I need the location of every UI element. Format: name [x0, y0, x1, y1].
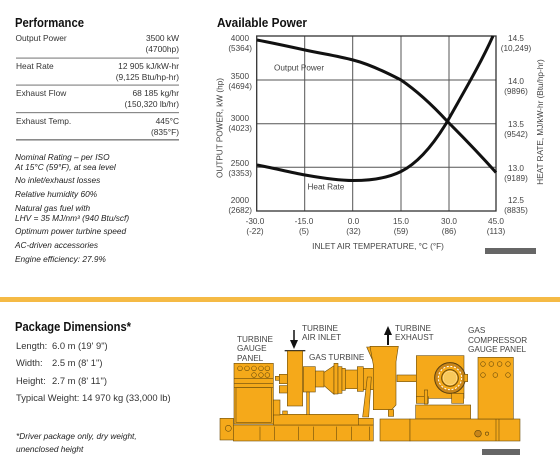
- label: turbine gauge panel: GAUGE: [237, 344, 267, 353]
- list: dimensions: 6.0 m (19' 9"): [52, 340, 108, 351]
- text block: rating notes: At 15°C (59°F), at sea level: [14, 162, 117, 172]
- air inlet: [275, 350, 305, 406]
- left axis ticks: (5364): [228, 44, 252, 53]
- arrow: exhaust: [387, 333, 389, 345]
- row: exhaust flow: 68 185 kg/hr: [132, 88, 179, 98]
- row: exhaust flow: (150,320 lb/hr): [125, 99, 179, 109]
- arrowhead: exhaust: [384, 326, 392, 335]
- row: heat rate: 12 905 kJ/kW-hr: [118, 61, 179, 71]
- row: output power: [16, 33, 179, 54]
- label: turbine air inlet: [302, 324, 341, 342]
- bottom axis ticks: 0.0: [348, 217, 360, 226]
- list: dimensions: 2.5 m (8' 1"): [52, 357, 102, 368]
- footnote: *Driver package only, dry weight,: [16, 431, 137, 441]
- list: dimensions: Length:: [16, 340, 47, 351]
- bottom axis ticks: (113): [487, 227, 506, 236]
- bottom axis ticks: 15.0: [393, 217, 409, 226]
- text block: rating notes: AC-driven accessories: [14, 240, 98, 250]
- left axis ticks: (3353): [228, 169, 252, 178]
- row: heat rate: [16, 61, 179, 82]
- right axis ticks: 14.5: [508, 34, 524, 43]
- text block: rating notes: LHV = 35 MJ/nm³ (940 Btu/scf): [15, 213, 129, 223]
- exhaust stack: [370, 346, 416, 416]
- text block: rating notes: Optimum power turbine speed: [15, 226, 127, 236]
- text block: rating notes: Engine efficiency: 27.9%: [15, 254, 106, 264]
- diagram: turbine package: [220, 324, 527, 441]
- row: exhaust temperature: Exhaust Temp.: [16, 116, 71, 126]
- bottom axis ticks: 45.0: [488, 217, 504, 226]
- bottom axis ticks: (-22): [246, 227, 264, 236]
- heading: performance: Performance: [15, 15, 84, 30]
- label: turbine air inlet: TURBINE: [302, 324, 338, 333]
- left axis ticks: (2682): [228, 206, 252, 215]
- panel: performance: [15, 15, 179, 141]
- axis title: left: OUTPUT POWER, kW (hp): [216, 78, 224, 178]
- right axis ticks: (9896): [504, 87, 528, 96]
- row: output power: 3500 kW: [146, 33, 179, 43]
- right axis ticks: 13.0: [508, 164, 524, 173]
- label: turbine air inlet: AIR INLET: [302, 333, 341, 342]
- right axis ticks: (9189): [504, 174, 528, 183]
- curve: heat rate: [257, 36, 493, 180]
- row: exhaust temperature: [16, 116, 179, 137]
- label: turbine exhaust: EXHAUST: [395, 333, 434, 342]
- text block: rating notes: Nominal Rating – per ISO: [15, 152, 110, 162]
- label: turbine gauge panel: TURBINE: [237, 335, 273, 344]
- curve: output power: [257, 40, 496, 172]
- label: gas compressor gauge panel: GAS: [468, 326, 486, 335]
- right axis ticks: (9542): [504, 130, 528, 139]
- arrow: air inlet: [293, 330, 295, 341]
- label: output power: Output Power: [274, 64, 324, 72]
- turbine gauge panel: [234, 363, 287, 424]
- label: gas turbine: GAS TURBINE: [309, 353, 365, 362]
- right axis ticks: 12.5: [508, 196, 524, 205]
- bottom axis ticks: (86): [442, 227, 457, 236]
- equipment: left half: [220, 347, 385, 441]
- compressor gauge panel: [478, 357, 513, 419]
- line chart: available power: [216, 34, 545, 251]
- skid base right: [380, 419, 520, 441]
- left axis ticks: (4023): [228, 124, 252, 133]
- row: output power: (4700hp): [145, 44, 179, 54]
- axis title: right: HEAT RATE, MJ/kW-hr (Btu/hp-hr): [536, 59, 545, 185]
- axis title: bottom: INLET AIR TEMPERATURE, °C (°F): [312, 242, 444, 251]
- label: turbine exhaust: [395, 324, 434, 342]
- right axis ticks: 14.0: [508, 77, 524, 86]
- text block: rating notes: No inlet/exhaust losses: [15, 175, 100, 185]
- list: dimensions: Width:: [16, 357, 43, 368]
- bottom axis ticks: 30.0: [441, 217, 457, 226]
- heading: package dimensions: Package Dimensions*: [15, 319, 132, 334]
- list: dimensions: [16, 340, 171, 403]
- row: heat rate: (9,125 Btu/hp-hr): [116, 72, 179, 82]
- left axis ticks: (4694): [228, 82, 252, 91]
- left axis ticks: 3000: [231, 114, 249, 123]
- left axis ticks: 2500: [231, 159, 249, 168]
- gas turbine: [303, 347, 385, 417]
- label: turbine gauge panel: [237, 335, 273, 363]
- bottom axis ticks: (5): [299, 227, 309, 236]
- bottom axis ticks: -30.0: [246, 217, 265, 226]
- label: turbine gauge panel: PANEL: [237, 354, 264, 363]
- row: heat rate: Heat Rate: [16, 61, 54, 71]
- label: gas compressor gauge panel: COMPRESSOR: [468, 336, 527, 345]
- label: gas compressor gauge panel: [468, 326, 527, 354]
- equipment: right half: [370, 346, 520, 441]
- footnote: [16, 431, 137, 454]
- row: exhaust flow: Exhaust Flow: [16, 88, 67, 98]
- row: exhaust flow: [16, 88, 179, 109]
- left axis ticks: 4000: [231, 34, 249, 43]
- row: exhaust temperature: (835°F): [151, 127, 179, 137]
- row: exhaust temperature: 445°C: [156, 116, 179, 126]
- text block: rating notes: Relative humidity 60%: [15, 189, 98, 199]
- bottom axis ticks: (32): [346, 227, 361, 236]
- list: dimensions: 2.7 m (8' 11"): [52, 375, 107, 386]
- divider band: [0, 297, 560, 302]
- text block: rating notes: Natural gas fuel with: [15, 203, 91, 213]
- bottom axis ticks: (59): [394, 227, 409, 236]
- label: gas compressor gauge panel: GAUGE PANEL: [468, 345, 527, 354]
- right axis ticks: (8835): [504, 206, 528, 215]
- label: heat rate: Heat Rate: [308, 182, 345, 192]
- list: dimensions: Typical Weight: 14 970 kg (33,000 lb): [16, 392, 171, 403]
- left axis ticks: 3500: [231, 72, 249, 81]
- right axis ticks: [501, 34, 532, 215]
- text block: rating notes: [14, 152, 129, 264]
- skid base left: [220, 414, 373, 441]
- right axis ticks: 13.5: [508, 120, 524, 129]
- right axis ticks: (10,249): [501, 44, 532, 53]
- arrowhead: air inlet: [290, 340, 298, 349]
- heading: available power: Available Power: [217, 15, 307, 30]
- footnote: unenclosed height: [16, 444, 84, 454]
- panel: package dimensions: [15, 319, 171, 454]
- bottom axis ticks: -15.0: [295, 217, 314, 226]
- left axis ticks: [228, 34, 252, 215]
- left axis ticks: 2000: [231, 196, 249, 205]
- compressor: [416, 356, 471, 419]
- label: turbine exhaust: TURBINE: [395, 324, 431, 333]
- bottom axis ticks: [246, 217, 506, 236]
- row: output power: Output Power: [16, 33, 67, 43]
- list: dimensions: Height:: [16, 375, 46, 386]
